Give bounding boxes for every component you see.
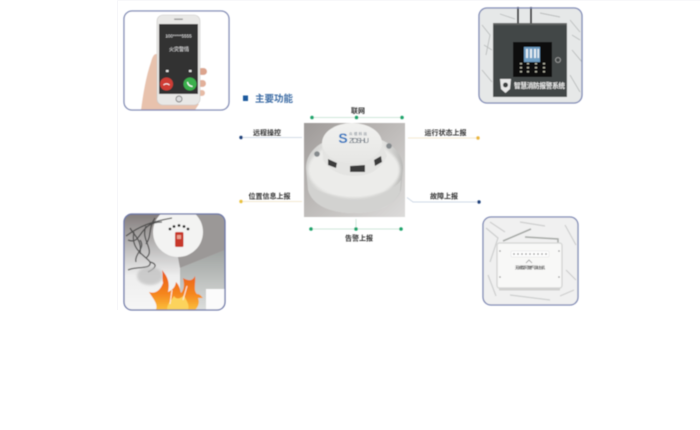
- button: accept: [184, 78, 196, 90]
- keypad: [520, 63, 545, 72]
- label: remote control: 远程操控: [253, 128, 281, 137]
- label: location report: 位置信息上报: [248, 192, 290, 200]
- connector: alarm bottom: [309, 219, 403, 231]
- vents: [328, 156, 382, 172]
- smoke: [126, 218, 172, 272]
- red sensor: [175, 232, 184, 247]
- system name: 智慧消防报警系统: [514, 81, 565, 90]
- connector: location report: [239, 200, 302, 203]
- label: alarm report: 告警上报: [345, 234, 373, 242]
- panel: wireless alarm host: [483, 217, 578, 305]
- antennas: [503, 229, 558, 243]
- heading: main functions: 主要功能: [255, 93, 294, 105]
- heading: main functions: [243, 93, 294, 105]
- label: fault report: 故障上报: [430, 192, 458, 200]
- antennas: [517, 7, 532, 24]
- icon: smartphone: [157, 15, 200, 105]
- infographic canvas: [117, 1, 584, 312]
- panel: fire alarm control system: [479, 7, 582, 103]
- flames: [149, 270, 203, 310]
- host label: 无线型可燃气体主机: [515, 265, 545, 270]
- label: status report: 运行状态上报: [424, 128, 466, 137]
- panel: fire and smoke detector scene: [124, 207, 225, 310]
- connector: status report: [408, 136, 480, 140]
- button: decline: [160, 78, 173, 90]
- photo: smoke detector: [304, 123, 405, 217]
- photo: smoke detector: 众视科技: [349, 131, 368, 136]
- detector top: [322, 143, 387, 176]
- logo text: ZOSHU: [349, 136, 369, 145]
- detector body: [306, 135, 403, 213]
- label: network: 联网: [351, 106, 365, 115]
- panel: phone call: [124, 11, 229, 110]
- logo mark: S: [338, 130, 348, 146]
- icon: hand holding phone: [141, 54, 207, 110]
- connector: remote control: [239, 136, 302, 139]
- LCD screen: [524, 47, 540, 62]
- caller label: 火灾警情: [169, 46, 189, 53]
- connector: network top: [310, 116, 404, 119]
- icon: shield badge: [500, 79, 511, 93]
- detector disc: [153, 207, 203, 257]
- connector: fault report: [407, 198, 481, 204]
- phone number: 100*****5555: [165, 34, 192, 38]
